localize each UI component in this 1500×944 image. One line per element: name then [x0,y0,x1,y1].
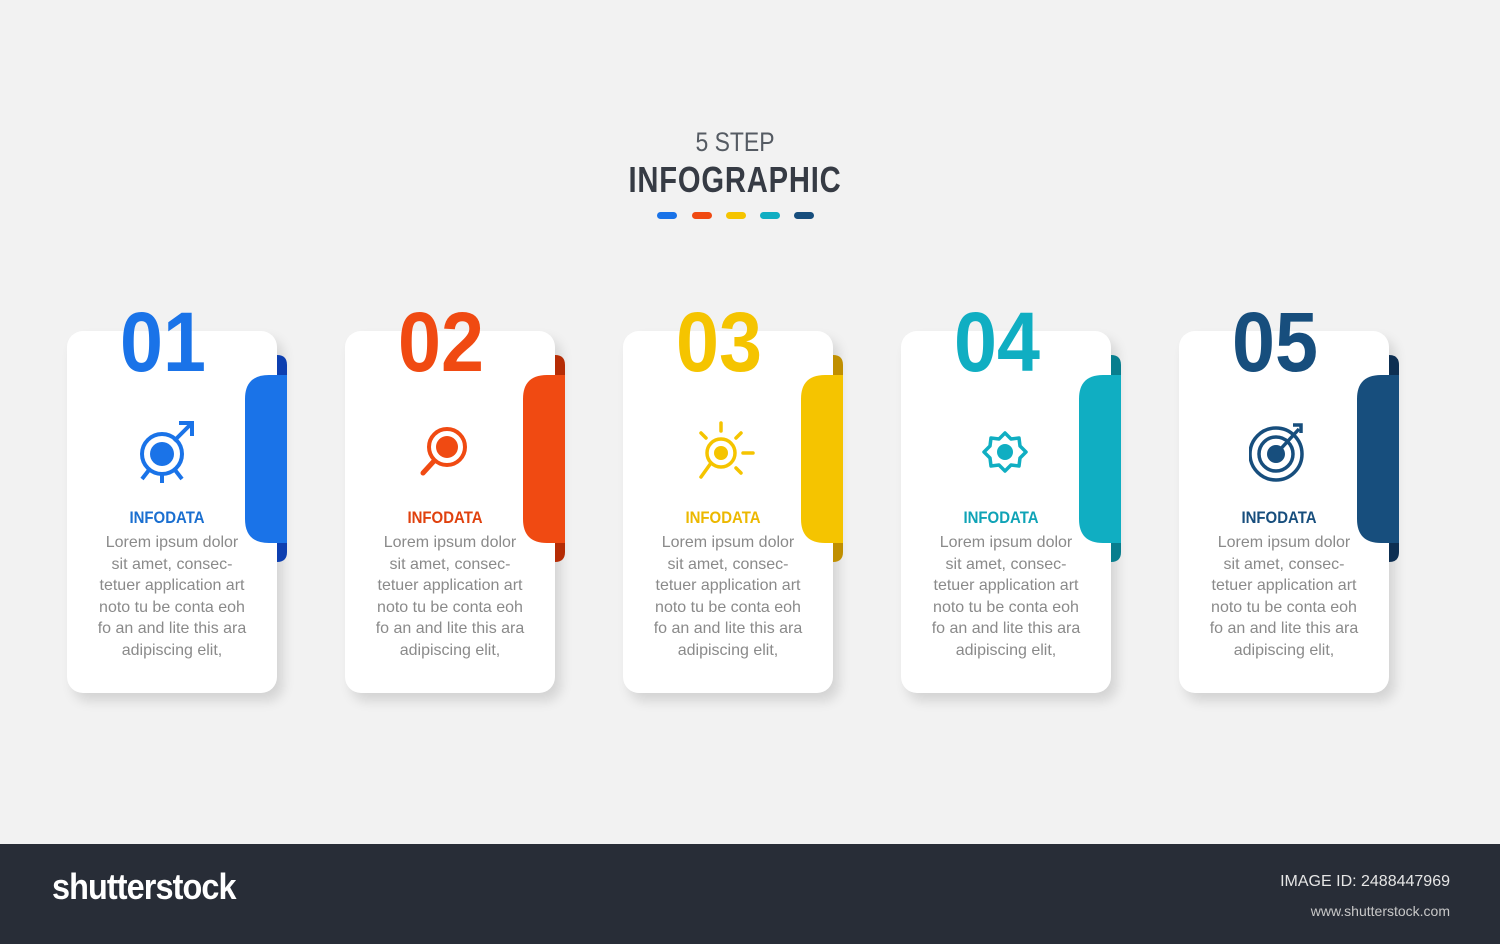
text 1: fo an and lite this ara [98,620,246,637]
tab 5 [1357,355,1399,562]
text 4: Lorem ipsum dolor [940,534,1072,551]
heading 3: INFODATA [685,508,761,527]
step 5 [1179,295,1399,704]
text 2: fo an and lite this ara [376,620,524,637]
icon: gear [982,431,1028,473]
subtitle: 5 STEP: 5 STEP [695,127,775,157]
text 1: adipiscing elit, [122,642,222,659]
footer logo: shutterstock [52,866,236,907]
text 1: Lorem ipsum dolor [106,534,238,551]
icon: lightbulb [699,421,755,479]
step 2 [345,295,565,704]
text 5: fo an and lite this ara [1210,620,1358,637]
text 3: fo an and lite this ara [654,620,802,637]
color dashes [657,212,814,219]
text 4 [932,534,1080,659]
text 4: noto tu be conta eoh [933,599,1079,616]
heading 5: INFODATA [1241,508,1317,527]
card 5 background [1179,331,1389,693]
website: www.shutterstock.com [1311,903,1450,919]
text 5: Lorem ipsum dolor [1218,534,1350,551]
card 4 background [901,331,1111,693]
tab 4 [1079,355,1121,562]
heading: INFOGRAPHIC: INFOGRAPHIC [628,159,842,200]
text 5 [1210,534,1358,659]
text 2: adipiscing elit, [400,642,500,659]
image id: IMAGE ID: 2488447969 [1280,873,1450,890]
title [628,127,842,200]
icon: male/target [140,421,194,483]
text 1 [98,534,246,659]
text 3: adipiscing elit, [678,642,778,659]
number 01: 01 [120,295,206,389]
icon: target [1249,423,1304,482]
number 02: 02 [398,295,484,389]
heading 4: INFODATA [963,508,1039,527]
text 5: noto tu be conta eoh [1211,599,1357,616]
tab 3 [801,355,843,562]
card 2 background [345,331,555,693]
text 2: sit amet, consec- [390,556,510,573]
text 2: tetuer application art [378,577,522,594]
text 1: sit amet, consec- [112,556,232,573]
text 3 [654,534,802,659]
text 1: noto tu be conta eoh [99,599,245,616]
text 4: tetuer application art [934,577,1078,594]
number 04: 04 [954,295,1040,389]
heading 2: INFODATA [407,508,483,527]
tab 2 [523,355,565,562]
step 1 [67,295,287,704]
text 3: tetuer application art [656,577,800,594]
heading 1: INFODATA [129,508,205,527]
number 05: 05 [1232,295,1318,389]
text 5: tetuer application art [1212,577,1356,594]
step 4 [901,295,1121,704]
text 3: sit amet, consec- [668,556,788,573]
number 03: 03 [676,295,762,389]
card 1 background [67,331,277,693]
text 2: noto tu be conta eoh [377,599,523,616]
icon: magnifier [420,427,467,476]
card 3 background [623,331,833,693]
text 4: adipiscing elit, [956,642,1056,659]
text 1: tetuer application art [100,577,244,594]
text 3: Lorem ipsum dolor [662,534,794,551]
footer bar [0,844,1500,944]
text 5: adipiscing elit, [1234,642,1334,659]
text 2 [376,534,524,659]
text 3: noto tu be conta eoh [655,599,801,616]
text 4: sit amet, consec- [946,556,1066,573]
text 2: Lorem ipsum dolor [384,534,516,551]
text 4: fo an and lite this ara [932,620,1080,637]
text 5: sit amet, consec- [1224,556,1344,573]
step 3 [623,295,843,704]
tab 1 [245,355,287,562]
